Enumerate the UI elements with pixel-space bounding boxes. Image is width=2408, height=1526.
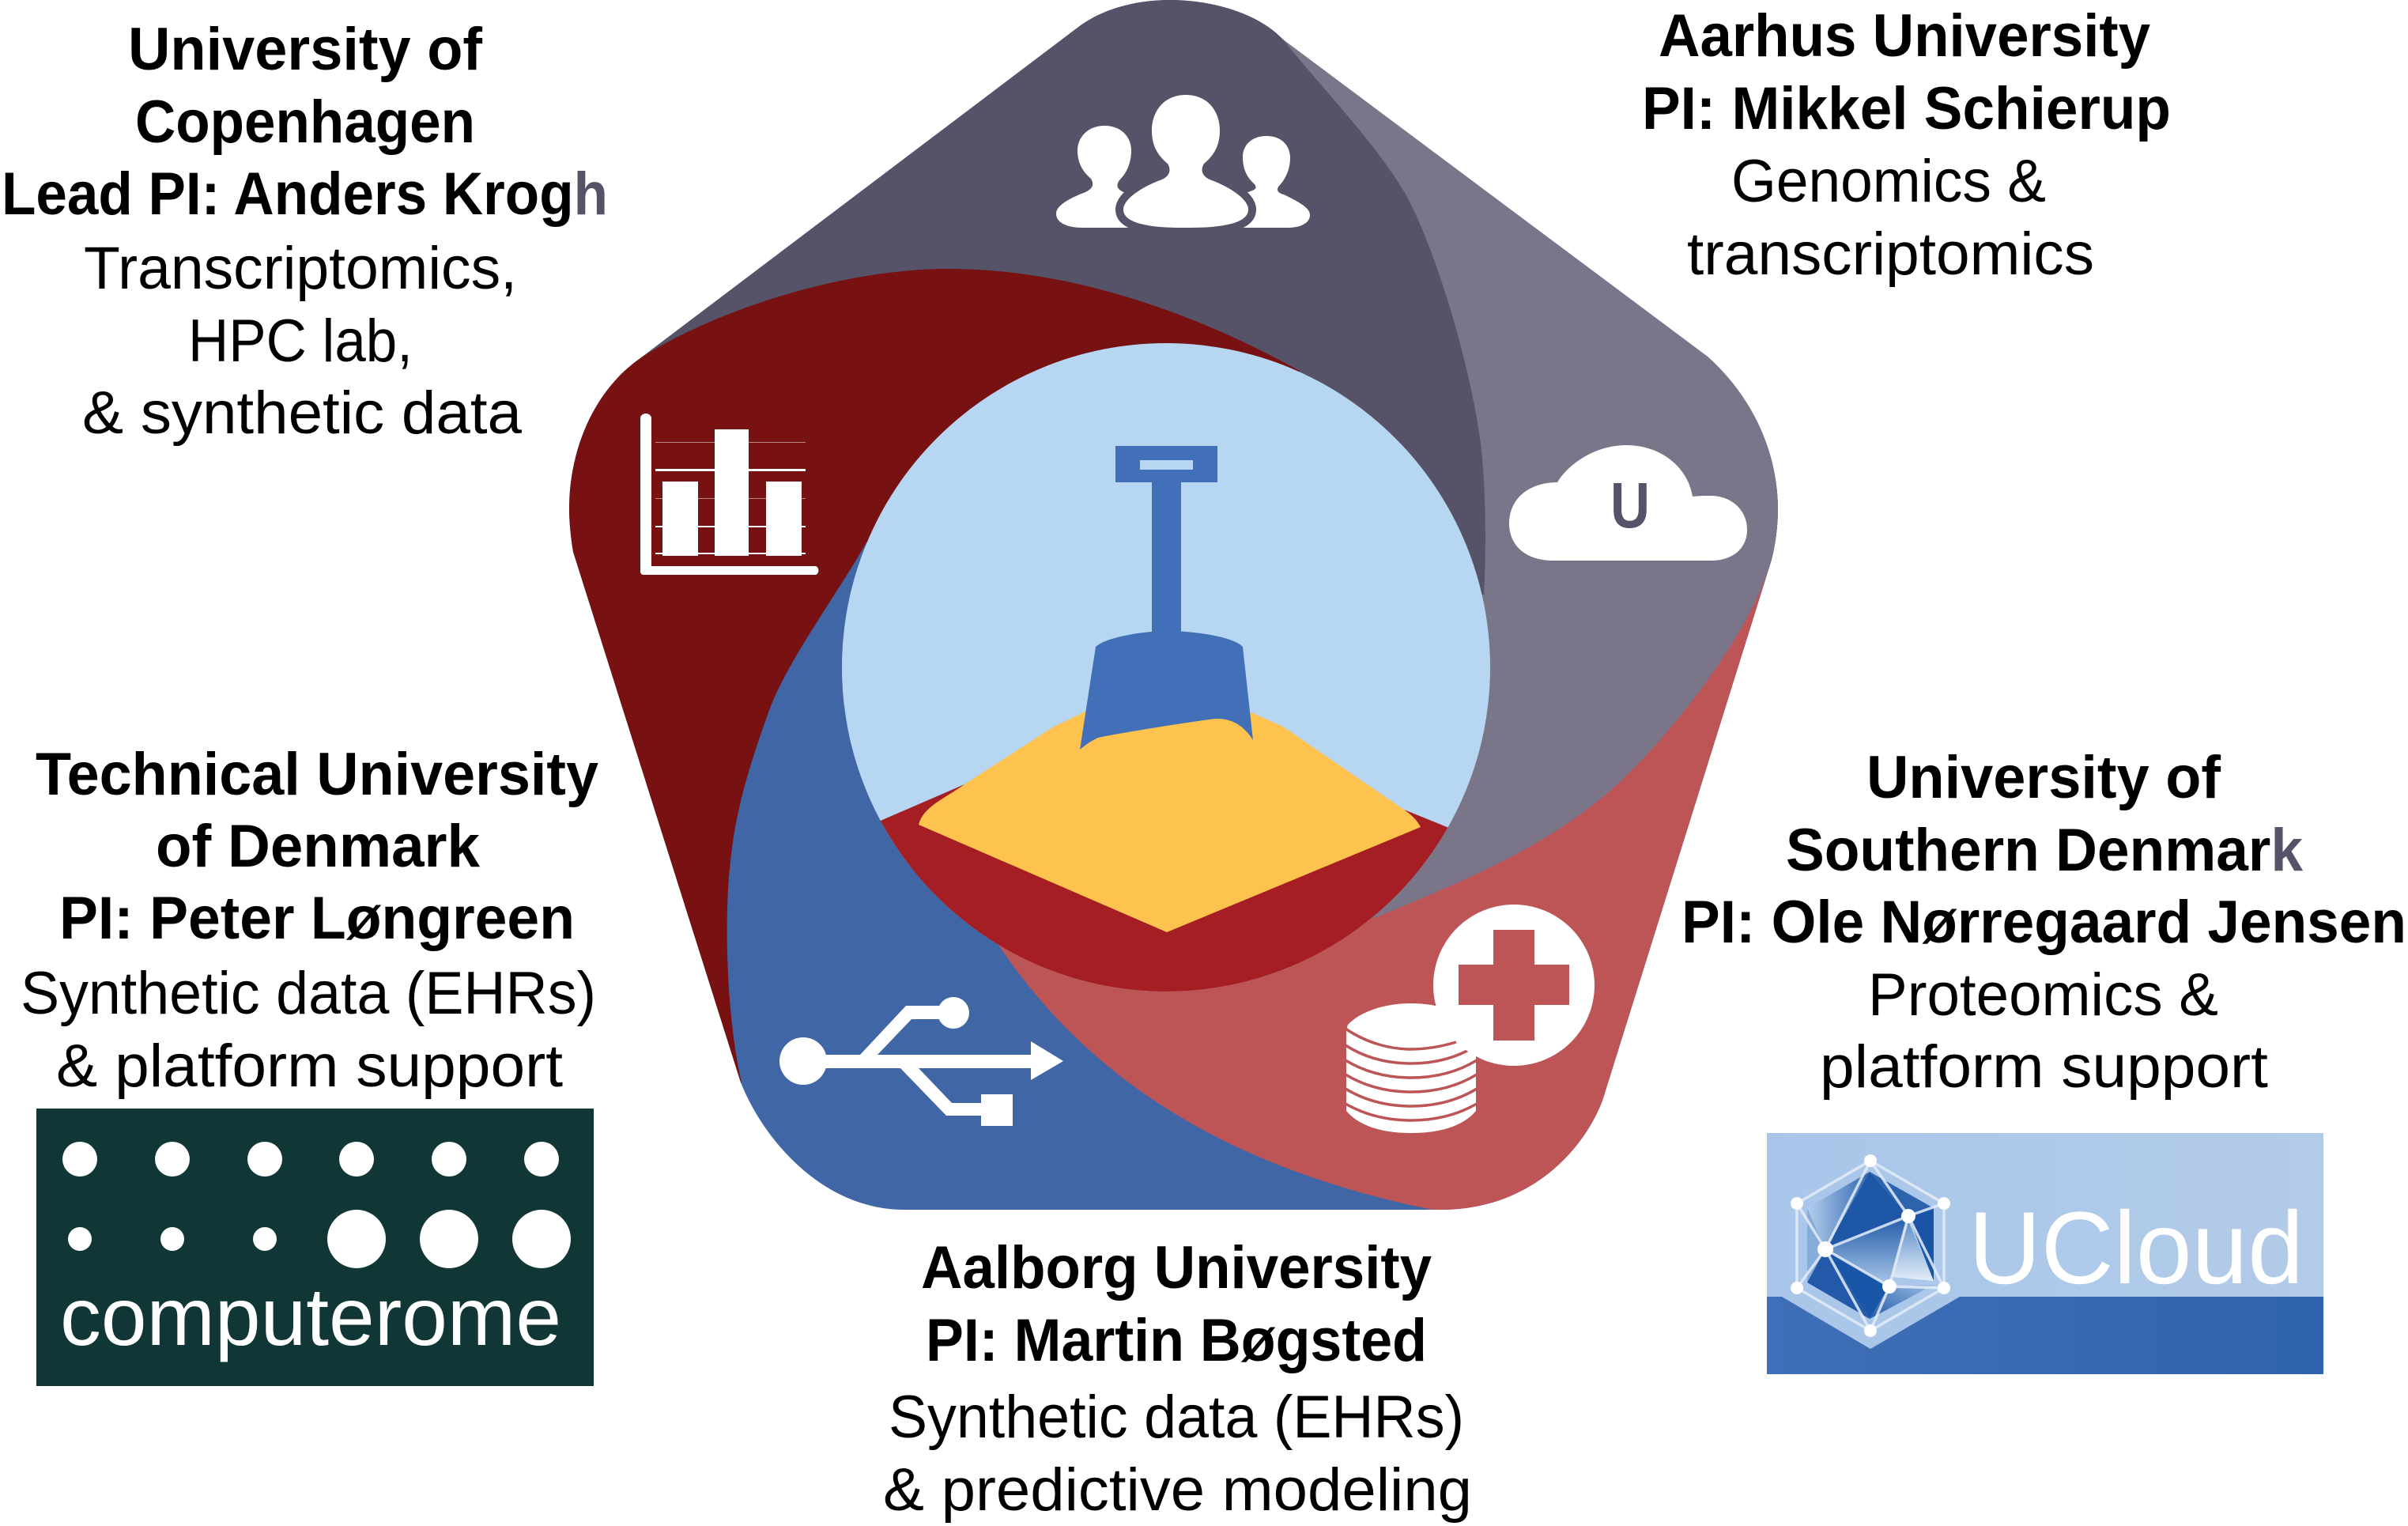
partner: Technical University of Denmark: Synthetic data (EHRs) [21, 960, 596, 1027]
partner: Aarhus University: Genomics & [1731, 148, 2046, 215]
petal: Aarhus slate top [603, 0, 1485, 595]
partner: University of Copenhagen: Lead PI: Anders Krogh [2, 161, 608, 228]
dot grid [62, 1142, 571, 1268]
petal: Aalborg blue [553, 0, 1818, 1233]
dark red ground [881, 784, 1448, 992]
petal: Copenhagen dark red [553, 237, 1300, 1107]
icon: shovel [1080, 446, 1253, 750]
partner: Aarhus University: Aarhus University [1659, 2, 2150, 70]
pentagon diagram [553, 0, 1818, 1233]
network nodes [1791, 1154, 1950, 1337]
coin stack [1346, 1003, 1477, 1133]
icon: coin stack and medical cross [1346, 905, 1595, 1133]
logo: UCloud [1767, 1133, 2323, 1374]
partner: University of Copenhagen: & synthetic data [82, 380, 523, 447]
partner: Aarhus University: PI: Mikkel Schierup [1642, 75, 2171, 142]
partner: Technical University of Denmark: of Denmark [156, 813, 481, 880]
partner: Technical University of Denmark: PI: Peter Løngreen [59, 885, 575, 952]
partner: University of Southern Denmark: platform support [1820, 1033, 2268, 1101]
partner: Aalborg University: PI: Martin Bøgsted [926, 1307, 1427, 1374]
partner: University of Southern Denmark: Proteomics & [1868, 961, 2218, 1029]
partner: Technical University of Denmark [21, 741, 598, 1100]
partner: Aalborg University: & predictive modeling [883, 1456, 1472, 1524]
wordmark: UCloud [1968, 1190, 2304, 1305]
crystal facets [1807, 1172, 1934, 1319]
partner: Aalborg University [883, 1234, 1472, 1524]
partner: University of Copenhagen: University of [128, 16, 483, 83]
partner: Technical University of Denmark: & platform support [56, 1033, 563, 1100]
icon: cloud with U: U [1610, 470, 1650, 542]
icon: cloud with U [1509, 445, 1747, 561]
partner: Aarhus University [1642, 2, 2171, 288]
hexagon backing [1782, 1297, 1960, 1349]
wordmark: computerome [60, 1271, 561, 1363]
partner: University of Copenhagen: HPC lab, [188, 308, 413, 375]
partner: University of Southern Denmark: University of [1866, 744, 2221, 811]
partner: University of Copenhagen [2, 16, 608, 447]
logo: computerome [36, 1109, 594, 1386]
medical cross badge [1433, 905, 1595, 1066]
partner: University of Copenhagen: Copenhagen [135, 89, 475, 156]
partner: Technical University of Denmark: Technical University [36, 741, 598, 808]
partner: Aarhus University: transcriptomics [1687, 221, 2094, 288]
icon: people [1056, 95, 1310, 228]
partner: Aalborg University: Synthetic data (EHRs) [889, 1384, 1464, 1451]
central disc with shovel and sand [830, 343, 1502, 1028]
pentagon petals [553, 0, 1818, 1233]
network edges [1797, 1161, 1944, 1331]
disc background [842, 343, 1490, 992]
partner: Aalborg University: Aalborg University [921, 1234, 1432, 1301]
icon: bar chart [640, 414, 818, 575]
partner: University of Copenhagen: Transcriptomics, [84, 235, 517, 302]
petal: Southern Denmark light red [997, 474, 1818, 1233]
partner: University of Southern Denmark: Southern Denmark [1786, 817, 2304, 884]
icon: USB symbol [779, 997, 1063, 1126]
partner: University of Southern Denmark [1681, 744, 2406, 1101]
sand pile [919, 711, 1421, 932]
petal: Aarhus grey [1265, 25, 1778, 919]
